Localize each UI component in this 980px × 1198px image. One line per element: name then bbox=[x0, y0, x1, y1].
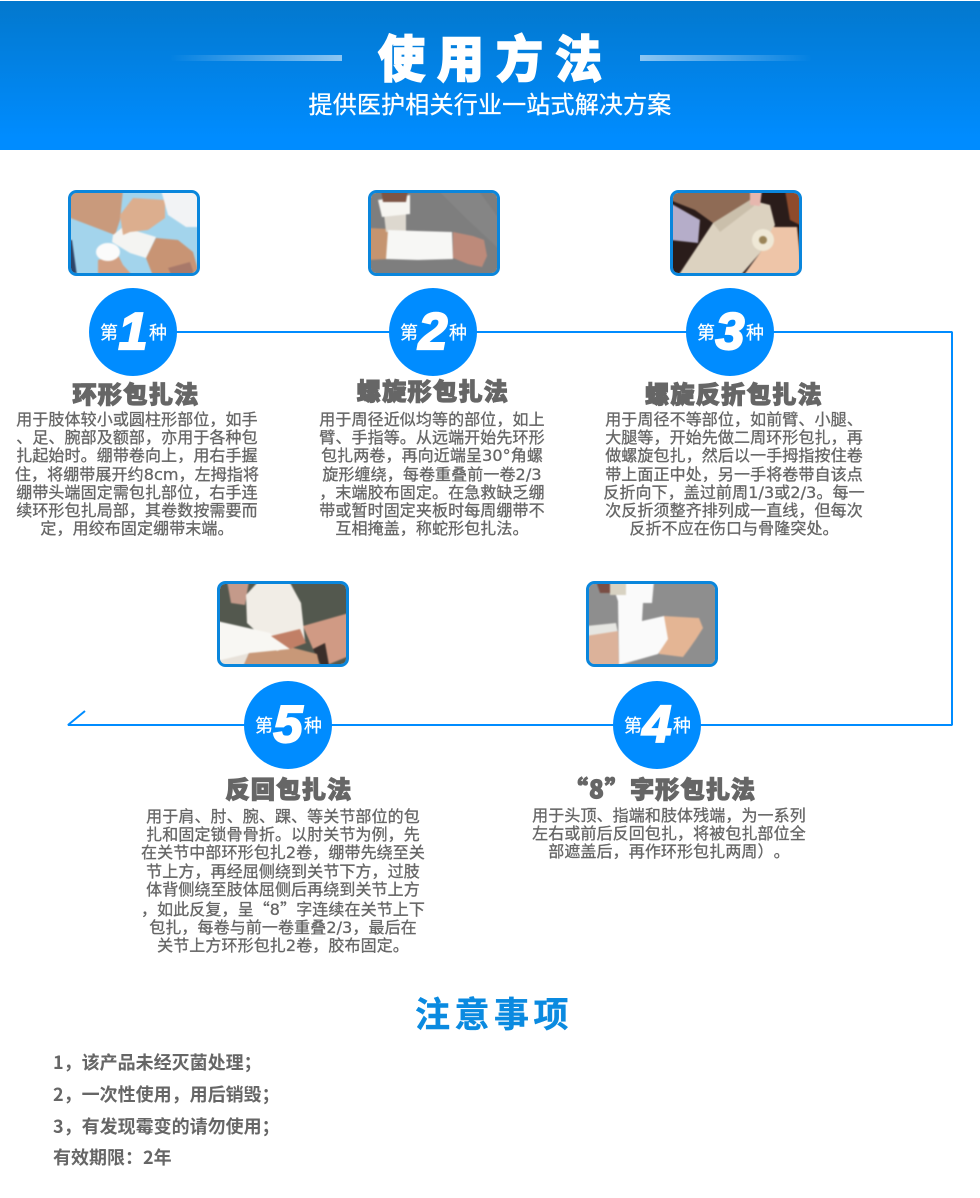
step 2 description bbox=[319, 410, 545, 538]
step 5 description: 包扎，每卷与前一卷重叠2/3，最后在 bbox=[149, 918, 417, 937]
step 3 description: 反折向下，盖过前周1/3或2/3。每一 bbox=[603, 483, 865, 502]
step 3 badge: 种 bbox=[746, 319, 764, 345]
note 1: 1，该产品未经灭菌处理； bbox=[53, 1049, 262, 1075]
notes list bbox=[53, 1049, 280, 1170]
step 5 description: 体背侧绕至肢体屈侧后再绕到关节上方 bbox=[146, 880, 420, 899]
step 3 description bbox=[603, 410, 865, 538]
step 1 description bbox=[15, 410, 259, 538]
step 3 badge: 第 bbox=[697, 319, 715, 345]
step 4 description: 用于头顶、指端和肢体残端，为一系列 bbox=[532, 806, 806, 825]
step 2 badge: 第 bbox=[400, 319, 418, 345]
step 2 description: ，末端胶布固定。在急救缺乏绷 bbox=[319, 483, 545, 502]
step 4 description: 左右或前后反回包扎，将被包扎部位全 bbox=[532, 824, 806, 843]
step 5 heading: 反回包扎法 bbox=[226, 770, 352, 805]
step 2 description: 带或暂时固定夹板时每周绷带不 bbox=[319, 501, 545, 520]
step 5 badge: 5 bbox=[274, 696, 302, 754]
step 2 badge: 2 bbox=[419, 303, 447, 361]
step 2 description: 用于周径近似均等的部位，如上 bbox=[319, 410, 545, 429]
note 2: 2，一次性使用，用后销毁； bbox=[53, 1081, 280, 1107]
step 2 heading: 螺旋形包扎法 bbox=[357, 372, 509, 407]
note 4: 有效期限：2年 bbox=[53, 1144, 172, 1170]
step 5 description: 扎和固定锁骨骨折。以肘关节为例，先 bbox=[146, 825, 420, 844]
step 3 heading: 螺旋反折包扎法 bbox=[645, 375, 823, 410]
step 3 badge: 3 bbox=[716, 303, 744, 361]
step 2 description: 臂、手指等。从远端开始先环形 bbox=[319, 428, 545, 447]
notes heading: 注意事项 bbox=[415, 987, 573, 1038]
step 1 badge: 种 bbox=[149, 319, 167, 345]
step 4 badge: 第 bbox=[624, 712, 642, 738]
step 5 badge: 种 bbox=[304, 712, 322, 738]
step 2 badge: 种 bbox=[449, 319, 467, 345]
step 1 description: 扎起始时。绷带卷向上，用右手握 bbox=[16, 446, 258, 465]
step 1 badge: 第 bbox=[100, 319, 118, 345]
step 5 description: 关节上方环形包扎2卷，胶布固定。 bbox=[157, 936, 409, 955]
photo: step 2 bbox=[368, 190, 500, 276]
title: 使用方法 bbox=[378, 19, 614, 92]
step 1 description: 定，用绞布固定绷带末端。 bbox=[40, 519, 234, 538]
step 1 description: 住，将绷带展开约8cm，左拇指将 bbox=[15, 465, 259, 484]
step 3 description: 次反折须整齐排列成一直线，但每次 bbox=[605, 501, 863, 520]
step 5 badge bbox=[244, 681, 332, 769]
subtitle: 提供医护相关行业一站式解决方案 bbox=[308, 85, 672, 120]
step 3 description: 带上面正中处，另一手将卷带自该点 bbox=[605, 465, 863, 484]
step 5 description: 在关节中部环形包扎2卷，绷带先绕至关 bbox=[141, 843, 425, 862]
header banner bbox=[0, 1, 980, 150]
step 1 badge bbox=[89, 288, 177, 376]
right decorative bar bbox=[640, 55, 812, 61]
step 5 description: 用于肩、肘、腕、踝、等关节部位的包 bbox=[146, 807, 420, 826]
step 5 description bbox=[141, 807, 425, 955]
step 3 description: 做螺旋包扎，然后以一手拇指按住卷 bbox=[605, 446, 863, 465]
step 1 description: 、足、腕部及额部，亦用于各种包 bbox=[16, 428, 258, 447]
photo: step 4 bbox=[586, 581, 718, 667]
step 1 description: 绷带头端固定需包扎部位，右手连 bbox=[16, 483, 258, 502]
step 1 heading: 环形包扎法 bbox=[72, 375, 200, 410]
step 3 description: 反折不应在伤口与骨隆突处。 bbox=[629, 519, 839, 538]
step 1 description: 用于肢体较小或圆柱形部位，如手 bbox=[16, 410, 258, 429]
photo: step 5 bbox=[217, 581, 349, 667]
step 3 badge bbox=[686, 288, 774, 376]
step 2 description: 互相掩盖，称蛇形包扎法。 bbox=[335, 519, 529, 538]
step 1 badge: 1 bbox=[119, 303, 147, 361]
photo: step 3 bbox=[670, 190, 802, 276]
step 2 description: 旋形缠绕，每卷重叠前一卷2/3 bbox=[322, 465, 542, 484]
step 5 badge: 第 bbox=[255, 712, 273, 738]
step 2 badge bbox=[389, 288, 477, 376]
step 1 description: 续环形包扎局部，其卷数按需要而 bbox=[16, 501, 258, 520]
step 4 badge bbox=[613, 681, 701, 769]
step 5 description: 节上方，再经屈侧绕到关节下方，过肢 bbox=[146, 862, 420, 881]
step 2 description: 包扎两卷，再向近端呈30°角螺 bbox=[321, 446, 543, 465]
left decorative bar bbox=[170, 55, 342, 61]
step 4 description: 部遮盖后，再作环形包扎两周）。 bbox=[548, 842, 790, 861]
note 3: 3，有发现霉变的请勿使用； bbox=[53, 1113, 280, 1139]
step 4 badge: 4 bbox=[643, 696, 671, 754]
step 4 heading: “8”字形包扎法 bbox=[564, 770, 756, 805]
step 4 badge: 种 bbox=[673, 712, 691, 738]
step 5 description: ，如此反复，呈“8”字连续在关节上下 bbox=[141, 896, 425, 920]
step 4 description bbox=[532, 806, 806, 861]
step 3 description: 用于周径不等部位，如前臂、小腿、 bbox=[605, 410, 863, 429]
step 3 description: 大腿等，开始先做二周环形包扎，再 bbox=[605, 428, 863, 447]
photo: step 1 bbox=[68, 190, 200, 276]
